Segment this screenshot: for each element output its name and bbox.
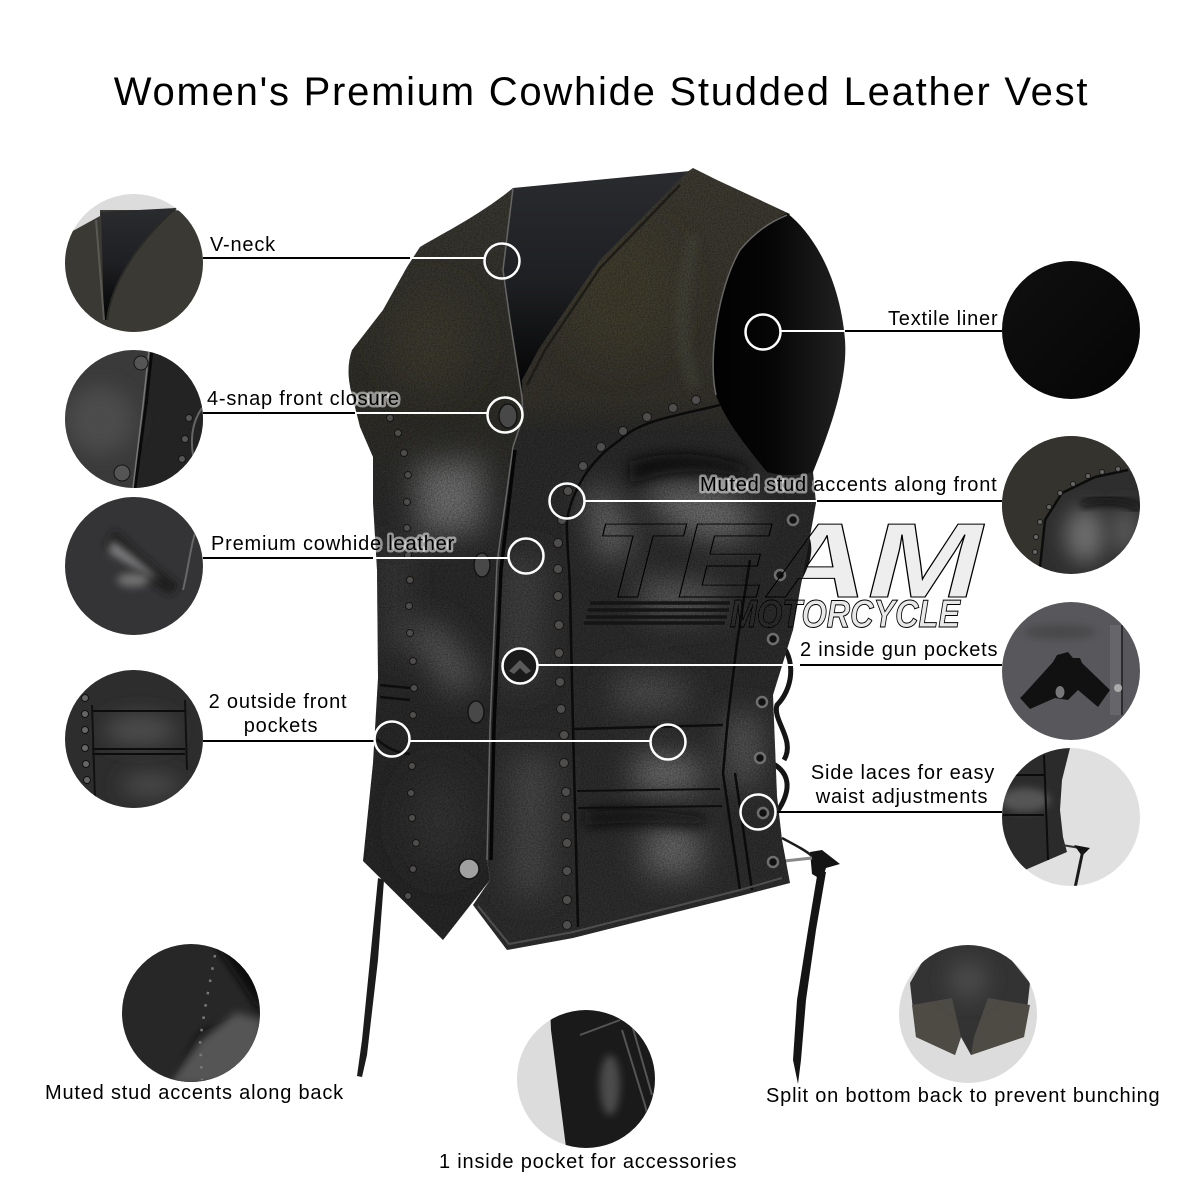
detail: back split (899, 930, 1037, 1083)
labels: 2 outside front (209, 691, 347, 713)
inside pocket chevron (504, 650, 536, 682)
left lace tail (357, 878, 384, 1077)
labels: Premium cowhide leather (211, 533, 455, 555)
detail: outside pockets (65, 670, 203, 808)
detail: textile liner (1002, 261, 1140, 399)
right vest front (470, 160, 820, 960)
bottom hem stitch (478, 878, 782, 944)
labels: V-neck (210, 234, 276, 256)
vest illustration (340, 160, 985, 1084)
labels: Textile liner (888, 308, 998, 330)
icon: pistol (1020, 652, 1110, 709)
armhole liner (713, 213, 845, 475)
detail: inside pocket (517, 1010, 655, 1148)
detail: back studs (122, 944, 262, 1085)
labels: Muted stud accents along back (45, 1082, 344, 1104)
labels: 4-snap front closure (207, 388, 400, 410)
snaps (459, 404, 517, 879)
detail: V-neck (65, 194, 203, 332)
callout ring markers (374, 244, 780, 830)
detail: snap closure (65, 345, 205, 490)
logo speed lines (584, 603, 730, 623)
front placket edge (487, 188, 523, 860)
pockets (377, 685, 723, 808)
studs (386, 396, 700, 930)
side lace eyelets (755, 515, 798, 867)
labels: Muted stud accents along front (700, 474, 998, 496)
detail: cowhide leather (65, 497, 203, 635)
labels (45, 234, 1160, 1173)
labels: pockets (244, 715, 318, 737)
watermark logo: MOTORCYCLE (730, 593, 961, 636)
labels: 1 inside pocket for accessories (439, 1151, 737, 1173)
labels: waist adjustments (815, 786, 988, 808)
title: Women's Premium Cowhide Studded Leather Vest (114, 70, 1089, 114)
neck liner (500, 171, 690, 395)
leader lines (203, 258, 1002, 812)
detail: gun pockets (1002, 602, 1140, 740)
armhole and collar seams (527, 185, 787, 927)
left vest front (348, 188, 522, 940)
side lace loops (765, 522, 809, 812)
watermark logo (584, 502, 985, 636)
labels: Split on bottom back to prevent bunching (766, 1085, 1160, 1107)
right lace tail and knot (775, 838, 840, 1084)
detail: stud accents front (1000, 435, 1145, 574)
watermark logo: TEAM (593, 502, 985, 620)
labels: Side laces for easy (811, 762, 995, 784)
detail: side laces (1002, 748, 1140, 886)
front placket shadow (491, 450, 515, 860)
labels: 2 inside gun pockets (800, 639, 998, 661)
